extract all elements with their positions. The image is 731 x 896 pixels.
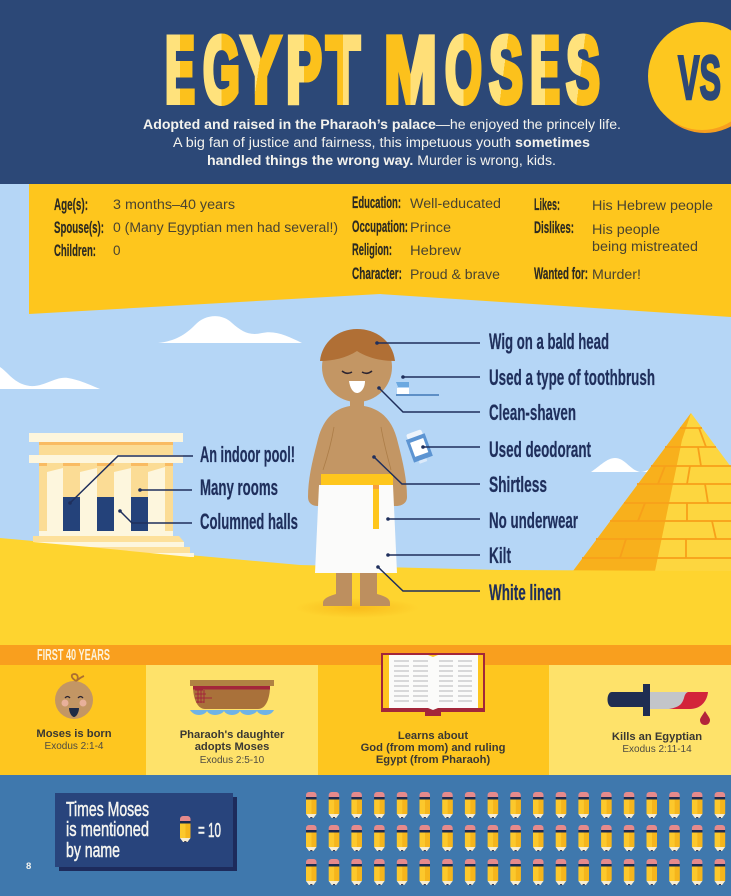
facts column 1: 0 [113,243,121,258]
event: Moses is born: Moses is born [36,728,112,740]
intro text [143,117,621,168]
facts column 1 [54,195,338,260]
pictogram: pencils row 3 [306,859,725,885]
temple doors [63,497,148,531]
pyramid [573,413,731,571]
facts column 3: Murder! [592,267,641,282]
kilt [315,485,397,573]
facts column 3: His people [592,222,660,237]
page number: 8 [26,861,31,872]
event: Learns about God and Egypt: God (from mom) and ruling [361,742,506,754]
Moses figure [295,329,419,618]
facts column 1: Age(s): [54,195,88,214]
temple [29,433,194,557]
timeline heading bar: FIRST 40 YEARS [37,647,110,664]
temple callouts [68,442,298,534]
facts column 3: Dislikes: [534,218,574,237]
mentions panel [0,775,731,896]
event: Pharaoh's daughter adopts Moses: Exodus 2:5-10 [200,755,265,766]
facts column 2: Hebrew [410,243,461,258]
figure callouts: Kilt [489,543,511,568]
facts column 2: Well-educated [410,196,501,211]
facts column 2: Education: [352,193,401,212]
legend box: by name [66,840,120,862]
pictogram: pencils row 1 [306,792,725,818]
event: Kills an Egyptian [608,684,710,755]
facts column 3: being mistreated [592,239,698,254]
facts column 2: Religion: [352,240,392,259]
VS badge [648,22,731,133]
facts column 2 [352,193,501,283]
event: Learns about God and Egypt [361,653,506,766]
torso and arms [308,398,407,506]
legs and feet [323,570,390,606]
title: S [566,17,600,122]
event: Moses is born: Exodus 2:1-4 [45,741,104,752]
facts column 1: 3 months–40 years [113,197,235,212]
event: Learns about God and Egypt: Learns about [398,730,468,742]
event: Learns about God and Egypt: Egypt (from Pharaoh) [376,754,490,766]
clouds [0,316,653,472]
temple callouts: Many rooms [200,475,278,500]
intro text: Adopted and raised in the Pharaoh’s palace —he enjoyed the princely life. [143,117,621,132]
facts column 2: Prince [410,220,451,235]
facts column 1: 0 (Many Egyptian men had several!) [113,220,338,235]
facts column 1: Spouse(s): [54,218,104,237]
legend box [55,793,237,871]
eyes [342,371,372,373]
figure callouts: Used deodorant [489,437,591,462]
facts column 2: Character: [352,264,402,283]
figure callouts: Wig on a bald head [489,329,609,354]
facts panel [29,184,731,317]
temple callouts: Columned halls [200,509,298,534]
event: Moses is born [36,674,112,752]
legend box: is mentioned [66,819,149,841]
title: E [165,17,195,122]
title: G [203,17,240,122]
event: Pharaoh's daughter adopts Moses [180,680,285,766]
hair [320,329,395,361]
title: M [384,17,437,122]
title: P [286,17,322,122]
event: Kills an Egyptian: Kills an Egyptian [612,731,702,743]
icon: deodorant [404,429,434,465]
title: T [326,17,360,122]
smile [349,381,365,393]
head [322,332,392,402]
intro text: handled things the wrong way. Murder is wrong, kids. [207,153,556,168]
timeline heading bar [0,645,731,665]
event: Pharaoh's daughter adopts Moses: adopts Moses [195,741,269,753]
sand ground [0,538,731,650]
legend box: Times Moses [66,799,149,821]
pictogram: pencils row 2 [306,825,725,851]
intro text: A big fan of justice and fairness, this impetuous youth sometimes [173,135,590,150]
header panel [0,0,731,184]
facts column 3: His Hebrew people [592,198,713,213]
facts column 2: Occupation: [352,217,408,236]
legend box: = 10 [198,820,221,842]
figure callouts: No underwear [489,508,578,533]
facts column 3: Likes: [534,195,560,214]
figure callouts: White linen [489,580,561,605]
title: S [489,17,523,122]
sky background [0,183,731,583]
belt [321,474,393,485]
figure callouts: Shirtless [489,472,547,497]
figure callouts: Clean-shaven [489,400,576,425]
title [165,17,600,122]
facts column 3: Wanted for: [534,264,588,283]
icon: legend pencil [180,816,190,842]
title: O [445,17,482,122]
icon: toothbrush [396,382,439,396]
facts column 1: Children: [54,241,96,260]
facts column 2: Proud & brave [410,267,500,282]
timeline [0,645,731,776]
temple callouts: An indoor pool! [200,442,295,467]
event: Kills an Egyptian: Exodus 2:11-14 [622,744,692,755]
title: Y [241,17,281,122]
title: E [530,17,560,122]
facts column 3 [534,195,713,283]
figure callouts [372,329,655,605]
event: Pharaoh's daughter adopts Moses: Pharaoh's daughter [180,729,285,741]
